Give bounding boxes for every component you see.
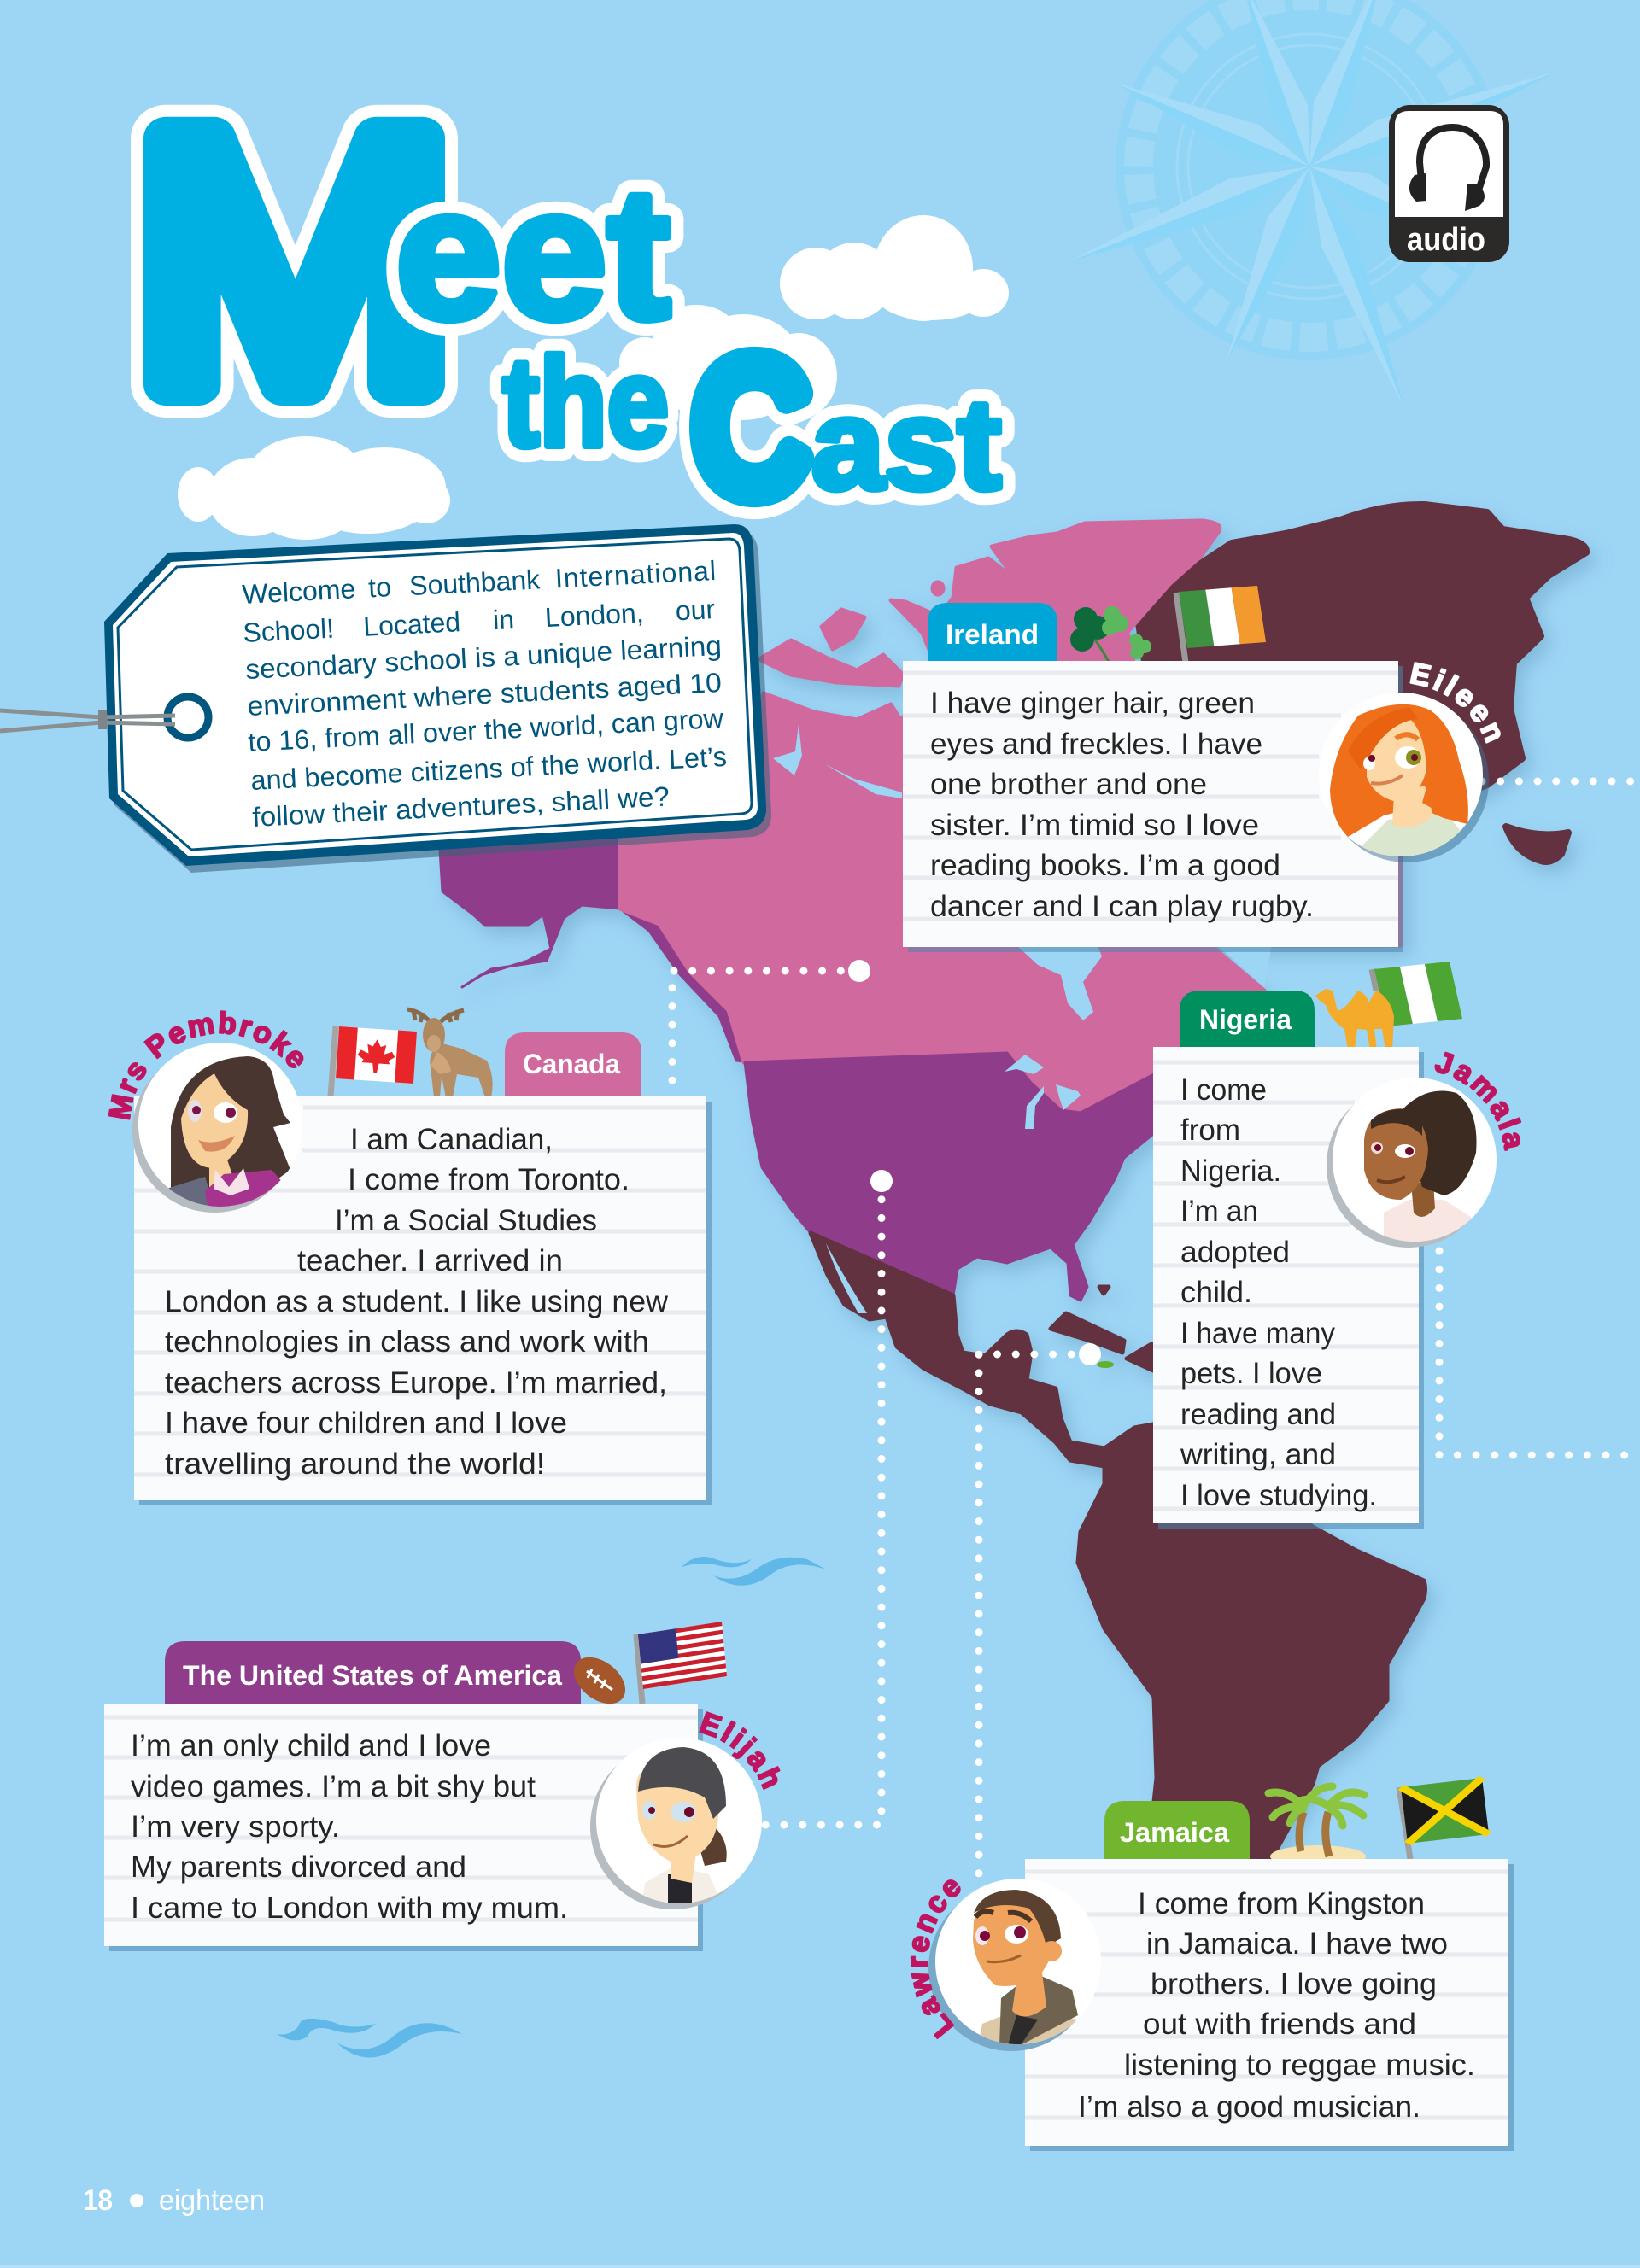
avatar: Elijah xyxy=(590,1711,781,1909)
icon: Jamaican flag xyxy=(1399,1778,1489,1859)
card: Nigeria text: I come xyxy=(1180,1073,1267,1107)
card: Canada text: travelling around the world! xyxy=(165,1447,545,1481)
tag text: and become citizens of the world. Let’s xyxy=(250,741,728,796)
icon: American flag xyxy=(636,1622,727,1704)
compass rose watermark xyxy=(1068,0,1559,410)
clouds xyxy=(178,215,1009,540)
title: Meet the Cast: ast xyxy=(811,372,1001,516)
card: Nigeria text: I’m an xyxy=(1180,1195,1258,1228)
tag text: Southbank xyxy=(408,564,542,601)
title: Meet the Cast xyxy=(135,61,1001,529)
name: Mrs Pembroke: Mrs Pembroke xyxy=(108,1010,304,1120)
cloud: upper right xyxy=(780,215,1009,321)
sea waves xyxy=(277,1557,826,2058)
tag text: to 16, from all over the world, can grow xyxy=(248,703,725,757)
card: Ireland text: reading books. I’m a good xyxy=(930,849,1280,882)
card: Ireland text: dancer and I can play rugby. xyxy=(930,890,1314,923)
map of the Americas and Greenland xyxy=(440,505,1586,1858)
title: Meet the Cast: M xyxy=(135,61,454,460)
card: Nigeria text: pets. I love xyxy=(1180,1357,1322,1390)
luggage tag: welcome text xyxy=(0,524,771,873)
map: Mexico, Central and South America, Caribbean xyxy=(811,1233,1425,1858)
card: Canada text: I come from Toronto. xyxy=(348,1163,630,1196)
card: Canada text: I have four children and I love xyxy=(165,1406,567,1440)
icon: Irish flag xyxy=(1176,586,1266,663)
page number xyxy=(83,2184,265,2217)
title: Meet the Cast: C xyxy=(694,324,807,529)
card: Canada text: teacher. I arrived in xyxy=(297,1244,563,1277)
dotted connector: USA xyxy=(752,1170,893,1825)
panel: Ireland xyxy=(903,586,1501,952)
avatar: Eileen xyxy=(1330,662,1501,862)
dotted connector: Canada xyxy=(672,960,870,1096)
title: Meet the Cast: ast xyxy=(811,372,1001,516)
title: Meet the Cast: eet xyxy=(395,150,671,358)
card: USA text xyxy=(104,1704,703,1951)
tag text: Welcome xyxy=(242,573,356,610)
map: Canada xyxy=(620,521,1401,1113)
tag text: secondary school is a unique learning xyxy=(245,630,723,685)
tab: Jamaica: Jamaica xyxy=(1120,1817,1229,1848)
card: Canada text: I am Canadian, xyxy=(350,1123,553,1156)
tag text: to xyxy=(367,571,392,604)
icon: shamrock xyxy=(1070,606,1151,662)
panel: USA xyxy=(104,1622,781,1951)
card: Nigeria text: from xyxy=(1180,1114,1240,1147)
tag text xyxy=(242,555,728,833)
name: Elijah: Elijah xyxy=(699,1711,781,1790)
dotted connector: Ireland xyxy=(1482,777,1640,786)
name: Eileen: Eileen xyxy=(1409,662,1501,744)
tab: Ireland: Ireland xyxy=(946,619,1039,650)
card: Nigeria text: reading and xyxy=(1180,1398,1336,1431)
card: Ireland text: I have ginger hair, green xyxy=(930,687,1255,720)
map: Greenland xyxy=(1139,505,1586,862)
card: Canada text xyxy=(134,1096,712,1505)
card: Canada text: technologies in class and work with xyxy=(165,1325,649,1359)
card: Nigeria text: adopted xyxy=(1180,1236,1290,1269)
card: Nigeria text: child. xyxy=(1180,1276,1252,1309)
tag text: environment where students aged 10 xyxy=(247,667,723,722)
icon: Nigerian flag xyxy=(1373,962,1462,1026)
card: Jamaica text: I come from Kingston xyxy=(1138,1887,1425,1920)
tab: Nigeria xyxy=(1180,991,1315,1052)
title: Meet the Cast: M xyxy=(135,61,454,460)
icon: camel xyxy=(1315,989,1394,1050)
card: USA text: My parents divorced and xyxy=(131,1850,466,1884)
tag text: follow their adventures, shall we? xyxy=(252,780,671,833)
page number: eighteen xyxy=(159,2184,265,2217)
map: Alaska xyxy=(440,828,752,1062)
tag text: London, xyxy=(544,597,644,633)
map: USA xyxy=(745,1053,1196,1301)
card: Jamaica text xyxy=(1025,1859,1514,2151)
card: USA text: I’m very sporty. xyxy=(131,1810,340,1844)
map: lakes and bays xyxy=(773,724,1273,1313)
tab: United States of America: The United States of America xyxy=(183,1660,562,1691)
tag text: in xyxy=(492,604,515,635)
icon: audio headphones badge: audio xyxy=(1407,222,1485,258)
cloud: lower left xyxy=(178,436,450,540)
panel: Canada xyxy=(108,1008,712,1505)
cloud: behind title C xyxy=(619,305,837,420)
card: Jamaica text: in Jamaica. I have two xyxy=(1146,1927,1448,1961)
tab: Canada: Canada xyxy=(523,1049,620,1079)
card: USA text: I came to London with my mum. xyxy=(131,1891,568,1925)
card: Ireland text: eyes and freckles. I have xyxy=(930,728,1262,761)
tag text: School! xyxy=(243,613,335,648)
title: Meet the Cast: C xyxy=(694,324,807,529)
tag text: Located xyxy=(362,606,461,642)
tab: Ireland xyxy=(928,603,1057,666)
card: Jamaica text: brothers. I love going xyxy=(1151,1967,1437,2001)
icon: palm trees on island xyxy=(1268,1786,1366,1868)
card: Nigeria text: writing, and xyxy=(1180,1438,1336,1471)
avatar: Lawrence xyxy=(911,1879,1101,2051)
tab: Nigeria: Nigeria xyxy=(1199,1004,1292,1035)
icon: moose xyxy=(407,1009,493,1098)
card: Canada text: I’m a Social Studies xyxy=(335,1204,597,1237)
card: Canada text: teachers across Europe. I’m married, xyxy=(165,1366,667,1400)
title: Meet the Cast: eet xyxy=(395,150,671,358)
card: Canada text: London as a student. I like using new xyxy=(165,1285,669,1318)
panel: Nigeria xyxy=(1153,962,1522,1529)
card: Nigeria text: I have many xyxy=(1180,1317,1335,1350)
page number: 18 xyxy=(83,2184,113,2217)
card: Nigeria text xyxy=(1153,1047,1424,1529)
dotted connector: Jamaica xyxy=(979,1343,1101,1876)
dotted connector: Nigeria xyxy=(1439,1251,1640,1455)
card: USA text: video games. I’m a bit shy but xyxy=(131,1770,536,1803)
icon: Canadian flag xyxy=(331,1026,417,1096)
tag text: our xyxy=(675,593,716,626)
tag text: International xyxy=(554,555,718,593)
tab: United States of America xyxy=(165,1641,581,1708)
card: Nigeria text: Nigeria. xyxy=(1180,1154,1281,1188)
icon: American football xyxy=(565,1648,634,1713)
card: Jamaica text: I’m also a good musician. xyxy=(1078,2090,1420,2124)
name: Lawrence: Lawrence xyxy=(911,1879,961,2039)
card: Jamaica text: out with friends and xyxy=(1143,2008,1416,2041)
card: Jamaica text: listening to reggae music. xyxy=(1124,2049,1475,2082)
tab: Canada xyxy=(505,1032,641,1102)
tab: Jamaica xyxy=(1104,1801,1250,1863)
avatar: Mrs Pembroke xyxy=(108,1010,304,1213)
card: USA text: I’m an only child and I love xyxy=(131,1729,491,1762)
name: Jamala: Jamala xyxy=(1435,1052,1522,1151)
title: Meet the Cast: the xyxy=(502,332,669,473)
avatar: Jamala xyxy=(1327,1052,1522,1248)
icon: audio headphones badge xyxy=(1389,105,1509,262)
panel: Jamaica xyxy=(911,1776,1514,2151)
title: Meet the Cast: the xyxy=(502,332,669,473)
card: Ireland text xyxy=(903,661,1403,952)
card: Ireland text: one brother and one xyxy=(930,768,1207,801)
tag hole and string xyxy=(0,697,208,738)
card: Ireland text: sister. I’m timid so I love xyxy=(930,809,1259,842)
card: Nigeria text: I love studying. xyxy=(1180,1479,1377,1512)
map: Jamaica xyxy=(1097,1361,1114,1368)
